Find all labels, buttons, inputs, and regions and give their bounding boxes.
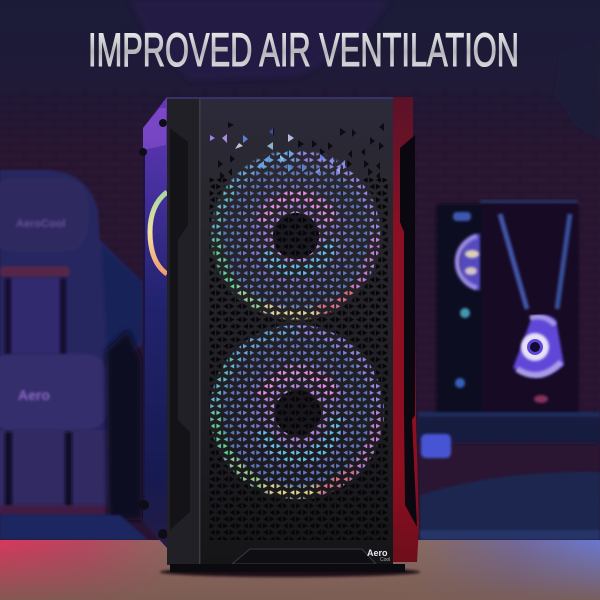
bottom intake cutout — [232, 549, 376, 564]
PC case — [139, 97, 420, 577]
side glass panel — [143, 97, 167, 548]
brand logo — [367, 548, 390, 563]
dark mesh — [209, 178, 388, 540]
gaming chair: Aero — [18, 387, 50, 403]
fan 1 hub — [273, 213, 319, 259]
gaming chair — [0, 170, 148, 540]
gaming chair: AeroCool — [16, 218, 66, 230]
fan 2 hub — [275, 390, 321, 436]
red side panel — [392, 97, 419, 562]
fan 2 hub mesh — [275, 390, 321, 436]
left strip groove — [170, 128, 190, 530]
desk shelf and right-hand objects — [418, 412, 600, 540]
thumb screws — [139, 119, 168, 539]
fan 2 light — [210, 325, 384, 499]
front panel face — [200, 97, 393, 565]
fan 1 hub mesh — [273, 213, 319, 259]
scattered lit triangles — [210, 128, 345, 176]
background PC on the right — [436, 200, 578, 416]
side fan light ring — [150, 192, 167, 274]
scattered mesh triangles — [218, 122, 384, 180]
table top — [0, 540, 600, 600]
brand logo: Cool — [380, 557, 390, 563]
fan 1 light — [212, 151, 380, 319]
case feet and shadow — [160, 564, 420, 577]
front left strip — [167, 97, 200, 565]
red panel vent — [400, 135, 417, 527]
brand logo: Aero — [367, 548, 388, 558]
